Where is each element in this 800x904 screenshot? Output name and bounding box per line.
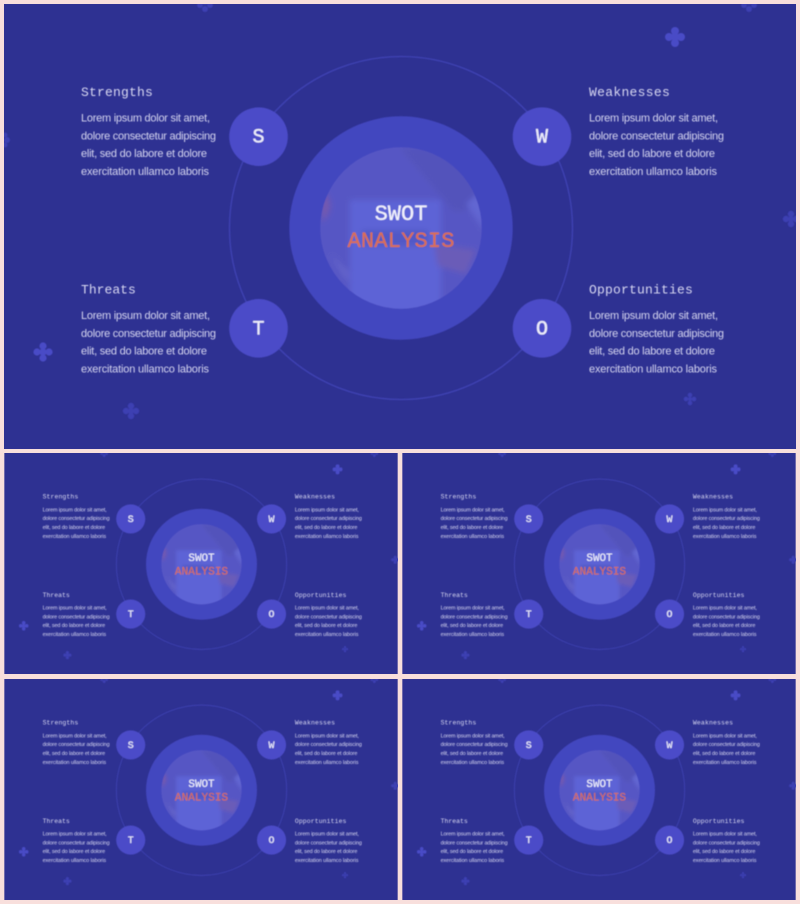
text: Weaknesses: exercitation ullamco laboris — [589, 166, 718, 178]
badge: T — [229, 299, 288, 358]
text: Opportunities — [295, 592, 362, 638]
text: Opportunities: dolore consectetur adipiscing — [693, 840, 760, 846]
text: Threats — [81, 282, 216, 376]
text: Weaknesses — [589, 85, 724, 178]
badge: T: T — [252, 318, 265, 341]
circle: middle ring — [146, 509, 257, 620]
circle: middle ring — [544, 509, 655, 620]
text: central title: SWOT — [188, 779, 215, 791]
panel: thumbnail top right — [402, 453, 796, 674]
text: Strengths: Strengths — [81, 85, 153, 100]
text: Weaknesses: exercitation ullamco laboris — [693, 760, 757, 766]
text: central title: ANALYSIS — [175, 793, 228, 805]
text: Opportunities: exercitation ullamco laboris — [693, 858, 757, 864]
text: Strengths: dolore consectetur adipiscing — [43, 516, 110, 522]
text: Strengths: elit, sed do labore et dolore — [81, 148, 207, 160]
text: central title — [573, 553, 626, 579]
text: Opportunities: Opportunities — [693, 818, 745, 825]
text: Weaknesses: elit, sed do labore et dolore — [693, 751, 755, 757]
text: Weaknesses: exercitation ullamco laboris — [295, 760, 359, 766]
text: Threats: elit, sed do labore et dolore — [81, 346, 207, 358]
text: Opportunities: Opportunities — [589, 282, 693, 298]
text: Strengths: Strengths — [441, 720, 476, 727]
badge: S: S — [526, 740, 532, 751]
badge: W — [655, 730, 684, 759]
text: Strengths: dolore consectetur adipiscing — [441, 516, 508, 522]
text: Strengths: Lorem ipsum dolor sit amet, — [43, 507, 107, 513]
image: tinted desk photo — [559, 524, 641, 610]
text: Weaknesses: Lorem ipsum dolor sit amet, — [589, 113, 718, 125]
text: Strengths: elit, sed do labore et dolore — [43, 751, 105, 757]
text: central title: ANALYSIS — [573, 567, 626, 579]
text: Opportunities: Opportunities — [693, 592, 745, 599]
text: Opportunities: Lorem ipsum dolor sit amet, — [589, 310, 718, 322]
badge: W: W — [536, 127, 548, 150]
badge: O: O — [667, 609, 673, 620]
badge: O — [655, 826, 684, 855]
text: Weaknesses — [295, 720, 362, 766]
text: Opportunities — [295, 818, 362, 864]
text: central title: SWOT — [586, 553, 613, 565]
text: Weaknesses: Lorem ipsum dolor sit amet, — [693, 507, 757, 513]
chart: outer orbit ring — [514, 705, 685, 875]
text: Strengths: elit, sed do labore et dolore — [441, 525, 503, 531]
icon: flower decorations — [417, 677, 797, 885]
text: Threats: dolore consectetur adipiscing — [43, 614, 110, 620]
text: Strengths: elit, sed do labore et dolore — [441, 751, 503, 757]
text: Threats: Lorem ipsum dolor sit amet, — [441, 831, 505, 837]
text: central title: ANALYSIS — [175, 567, 228, 579]
text: Threats: Lorem ipsum dolor sit amet, — [81, 310, 210, 322]
image: tinted desk photo — [161, 524, 243, 610]
badge: T: T — [128, 835, 134, 846]
text: Threats: dolore consectetur adipiscing — [441, 614, 508, 620]
text: Threats — [43, 592, 110, 638]
text: Strengths — [43, 494, 110, 540]
text: Weaknesses: elit, sed do labore et dolore — [589, 148, 715, 160]
text: Strengths: dolore consectetur adipiscing — [441, 742, 508, 748]
panel: thumbnail bottom left — [4, 679, 398, 900]
badge: O: O — [667, 835, 673, 846]
text: Opportunities: elit, sed do labore et dolore — [693, 849, 755, 855]
badge: S: S — [128, 514, 134, 525]
text: Weaknesses: dolore consectetur adipiscing — [693, 742, 760, 748]
text: central title: ANALYSIS — [573, 793, 626, 805]
text: Weaknesses — [693, 494, 760, 540]
text: Threats: exercitation ullamco laboris — [441, 858, 504, 864]
text: Weaknesses: elit, sed do labore et dolore — [295, 525, 357, 531]
badge: S — [514, 504, 543, 533]
chart: outer orbit ring — [116, 479, 287, 649]
text: central title — [175, 779, 228, 805]
text: Strengths: exercitation ullamco laboris — [441, 534, 504, 540]
badge: T — [514, 600, 543, 629]
image: tinted desk photo — [320, 147, 484, 320]
badge: W — [257, 504, 286, 533]
text: Threats: Threats — [441, 592, 468, 599]
text: central title: SWOT — [188, 553, 215, 565]
text: Weaknesses: dolore consectetur adipiscing — [295, 516, 362, 522]
chart: outer orbit ring — [514, 479, 685, 649]
text: Strengths: Strengths — [441, 494, 476, 501]
panel: main SWOT slide — [4, 4, 796, 449]
text: central title — [348, 202, 454, 254]
badge: S — [514, 730, 543, 759]
text: Opportunities: dolore consectetur adipiscing — [295, 614, 362, 620]
text: central title — [573, 779, 626, 805]
text: Opportunities: Lorem ipsum dolor sit amet, — [693, 605, 757, 611]
text: Opportunities: Opportunities — [295, 592, 347, 599]
text: Weaknesses — [295, 494, 362, 540]
text: Weaknesses: Lorem ipsum dolor sit amet, — [295, 507, 359, 513]
text: Opportunities: exercitation ullamco laboris — [295, 858, 359, 864]
text: Weaknesses: Lorem ipsum dolor sit amet, — [295, 733, 359, 739]
text: Opportunities: dolore consectetur adipiscing — [693, 614, 760, 620]
text: Weaknesses: Lorem ipsum dolor sit amet, — [693, 733, 757, 739]
text: Threats: exercitation ullamco laboris — [43, 632, 106, 638]
text: Weaknesses: Weaknesses — [295, 720, 335, 727]
icon: flower decorations — [19, 677, 399, 885]
text: Weaknesses: Weaknesses — [693, 720, 733, 727]
icon: flower decorations — [19, 451, 399, 659]
text: Strengths: exercitation ullamco laboris — [43, 760, 106, 766]
text: Threats: Threats — [43, 818, 70, 825]
badge: O — [513, 299, 571, 358]
badge: W: W — [667, 740, 673, 751]
text: central title — [175, 553, 228, 579]
badge: S — [116, 730, 145, 759]
text: Strengths: elit, sed do labore et dolore — [43, 525, 105, 531]
badge: W — [655, 504, 684, 533]
text: Strengths — [441, 494, 508, 540]
badge: O: O — [269, 609, 275, 620]
text: Strengths: exercitation ullamco laboris — [81, 166, 210, 178]
image: tinted desk photo — [161, 750, 243, 836]
text: Weaknesses — [693, 720, 760, 766]
badge: S — [229, 107, 288, 166]
text: Threats: Lorem ipsum dolor sit amet, — [43, 605, 107, 611]
text: Weaknesses: elit, sed do labore et dolore — [693, 525, 755, 531]
text: Strengths: dolore consectetur adipiscing — [81, 130, 216, 142]
text: Weaknesses: dolore consectetur adipiscing — [589, 130, 724, 142]
badge: S: S — [526, 514, 532, 525]
text: Opportunities: Lorem ipsum dolor sit amet, — [693, 831, 757, 837]
text: Opportunities — [693, 818, 760, 864]
text: Threats: elit, sed do labore et dolore — [43, 849, 105, 855]
text: Threats: exercitation ullamco laboris — [43, 858, 106, 864]
text: Opportunities: Opportunities — [295, 818, 347, 825]
circle: middle ring — [146, 735, 257, 846]
badge: T — [514, 826, 543, 855]
text: Opportunities: elit, sed do labore et dolore — [295, 623, 357, 629]
text: Threats: Lorem ipsum dolor sit amet, — [441, 605, 505, 611]
text: Strengths — [441, 720, 508, 766]
text: Strengths: exercitation ullamco laboris — [441, 760, 504, 766]
text: Threats — [441, 818, 508, 864]
text: Opportunities: dolore consectetur adipiscing — [295, 840, 362, 846]
text: Threats: elit, sed do labore et dolore — [441, 849, 503, 855]
text: Strengths: Lorem ipsum dolor sit amet, — [81, 113, 210, 125]
text: Strengths — [43, 720, 110, 766]
text: central title: SWOT — [375, 202, 427, 227]
badge: T: T — [128, 609, 134, 620]
text: Opportunities: elit, sed do labore et dolore — [295, 849, 357, 855]
text: Strengths: Lorem ipsum dolor sit amet, — [43, 733, 107, 739]
badge: S — [116, 504, 145, 533]
chart: outer orbit ring — [116, 705, 287, 875]
text: Opportunities: Lorem ipsum dolor sit amet, — [295, 831, 359, 837]
badge: W: W — [269, 514, 275, 525]
text: Opportunities: elit, sed do labore et dolore — [589, 346, 715, 358]
text: Weaknesses: exercitation ullamco laboris — [693, 534, 757, 540]
text: Opportunities — [693, 592, 760, 638]
text: Strengths — [81, 85, 216, 178]
badge: O: O — [536, 318, 548, 341]
text: Opportunities: exercitation ullamco laboris — [693, 632, 757, 638]
text: Threats — [43, 818, 110, 864]
text: Weaknesses: Weaknesses — [295, 494, 335, 501]
text: Weaknesses: dolore consectetur adipiscing — [295, 742, 362, 748]
badge: T: T — [526, 609, 532, 620]
text: Opportunities: Lorem ipsum dolor sit amet, — [295, 605, 359, 611]
text: Weaknesses: dolore consectetur adipiscing — [693, 516, 760, 522]
text: Threats: exercitation ullamco laboris — [441, 632, 504, 638]
icon: flower decorations — [417, 451, 797, 659]
text: Strengths: dolore consectetur adipiscing — [43, 742, 110, 748]
text: Weaknesses: Weaknesses — [693, 494, 733, 501]
badge: W — [257, 730, 286, 759]
text: Threats: Threats — [441, 818, 468, 825]
text: Threats: elit, sed do labore et dolore — [441, 623, 503, 629]
circle: middle ring — [544, 735, 655, 846]
text: Weaknesses: exercitation ullamco laboris — [295, 534, 359, 540]
badge: T — [116, 600, 145, 629]
badge: S: S — [252, 127, 265, 150]
text: Opportunities: elit, sed do labore et dolore — [693, 623, 755, 629]
text: Strengths: Strengths — [43, 720, 78, 727]
badge: W — [513, 107, 571, 166]
badge: O — [257, 600, 286, 629]
panel: thumbnail bottom right — [402, 679, 796, 900]
text: Threats: elit, sed do labore et dolore — [43, 623, 105, 629]
badge: O — [655, 600, 684, 629]
badge: O — [257, 826, 286, 855]
icon: flower decorations — [0, 0, 799, 419]
text: Threats: Threats — [81, 282, 136, 298]
text: Weaknesses: elit, sed do labore et dolore — [295, 751, 357, 757]
badge: W: W — [667, 514, 673, 525]
text: Opportunities: exercitation ullamco laboris — [295, 632, 359, 638]
text: Threats: dolore consectetur adipiscing — [441, 840, 508, 846]
text: Threats: Lorem ipsum dolor sit amet, — [43, 831, 107, 837]
text: Threats — [441, 592, 508, 638]
circle: middle ring — [289, 116, 513, 340]
text: Weaknesses: Weaknesses — [589, 85, 670, 100]
badge: W: W — [269, 740, 275, 751]
text: Threats: exercitation ullamco laboris — [81, 364, 210, 376]
text: Opportunities — [589, 282, 724, 376]
text: Threats: dolore consectetur adipiscing — [43, 840, 110, 846]
text: central title: ANALYSIS — [348, 229, 454, 254]
text: Threats: Threats — [43, 592, 70, 599]
text: Strengths: Lorem ipsum dolor sit amet, — [441, 733, 505, 739]
badge: T — [116, 826, 145, 855]
text: Strengths: exercitation ullamco laboris — [43, 534, 106, 540]
text: Threats: dolore consectetur adipiscing — [81, 328, 216, 340]
panel: thumbnail top left — [4, 453, 398, 674]
text: Opportunities: exercitation ullamco laboris — [589, 364, 718, 376]
chart: outer orbit ring — [230, 56, 572, 400]
text: Strengths: Strengths — [43, 494, 78, 501]
text: Strengths: Lorem ipsum dolor sit amet, — [441, 507, 505, 513]
image: tinted desk photo — [559, 750, 641, 836]
text: Opportunities: dolore consectetur adipiscing — [589, 328, 724, 340]
badge: T: T — [526, 835, 532, 846]
text: central title: SWOT — [586, 779, 613, 791]
badge: O: O — [269, 835, 275, 846]
badge: S: S — [128, 740, 134, 751]
